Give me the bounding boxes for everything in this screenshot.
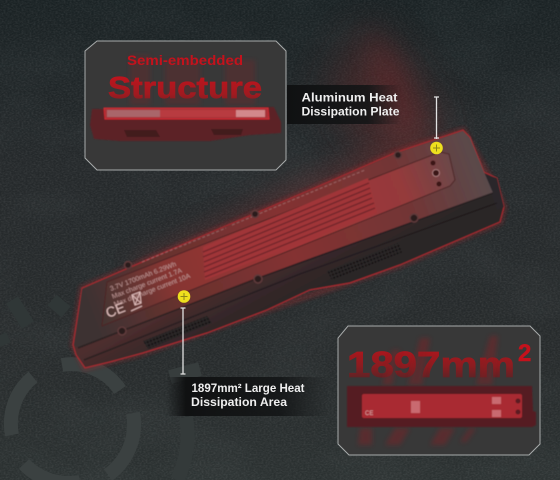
panel haze streaks [358, 336, 498, 445]
label: large area: 1897mm² Large Heat [192, 381, 304, 395]
printed spec label: Max charge current 1.7A [111, 267, 184, 301]
mini device [90, 107, 281, 141]
screws [118, 152, 418, 335]
heading: Semi-embedded [127, 52, 243, 68]
decorative target rings [0, 300, 200, 480]
fine print strip [142, 170, 365, 262]
pointer: area [178, 290, 190, 374]
device body [73, 130, 504, 368]
pointer: plate [430, 97, 443, 154]
label: large area [166, 377, 331, 416]
vent grills [143, 243, 403, 349]
printed spec label [107, 258, 192, 309]
label: aluminum plate [287, 85, 402, 124]
callout panel: 1897mm2 [338, 326, 540, 455]
side button [484, 174, 504, 210]
heat dissipation plate [102, 152, 455, 326]
bevel lines [78, 193, 497, 360]
ribbed section [203, 178, 377, 280]
mini device back [347, 386, 536, 427]
area value: 1897mm [347, 344, 515, 385]
battery device [73, 130, 504, 368]
CE mark: CE [103, 299, 127, 321]
printed spec label: Max discharge current 10A [113, 273, 192, 309]
red top surface [74, 131, 493, 348]
callout panel: semi-embedded structure [85, 41, 286, 170]
plate holes [430, 160, 442, 186]
panel haze [130, 55, 255, 105]
label: large area: Dissipation Area [191, 395, 287, 409]
superscript: 2 [518, 340, 531, 367]
recycling mark [131, 292, 142, 311]
printed spec label: 3.7V 1700mAh 6.29Wh [109, 261, 178, 293]
device glow [73, 130, 504, 368]
red heat haze [130, 25, 450, 280]
heading large: Structure [108, 70, 262, 105]
mini device back: CE [365, 411, 373, 417]
label: aluminum plate: Aluminum Heat [302, 90, 398, 104]
label: aluminum plate: Dissipation Plate [302, 104, 400, 118]
